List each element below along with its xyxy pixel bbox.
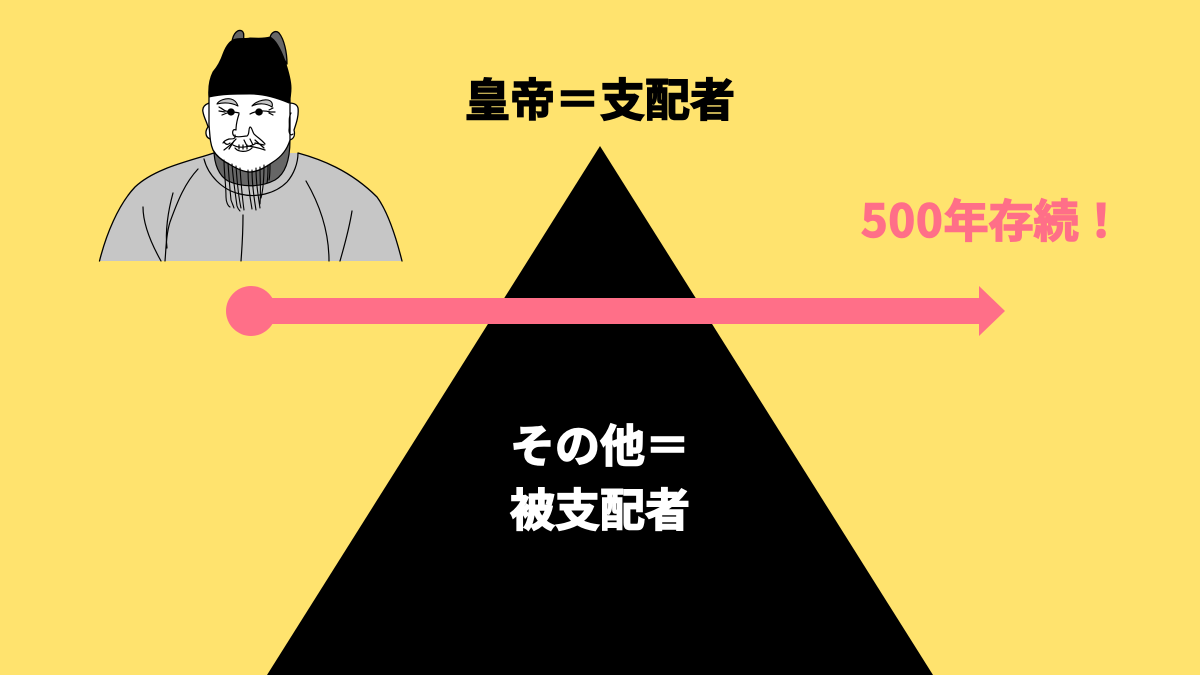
arrow shaft and head <box>251 286 1005 336</box>
label: everyone else is ruled <box>510 410 690 539</box>
label: 500 years duration: 500年存続！ <box>861 185 1124 250</box>
heading: emperor equals ruler: 皇帝＝支配者 <box>465 64 735 129</box>
label: everyone else is ruled: その他＝ <box>510 410 690 475</box>
label: everyone else is ruled: 被支配者 <box>510 474 690 539</box>
timeline start dot <box>226 286 276 336</box>
